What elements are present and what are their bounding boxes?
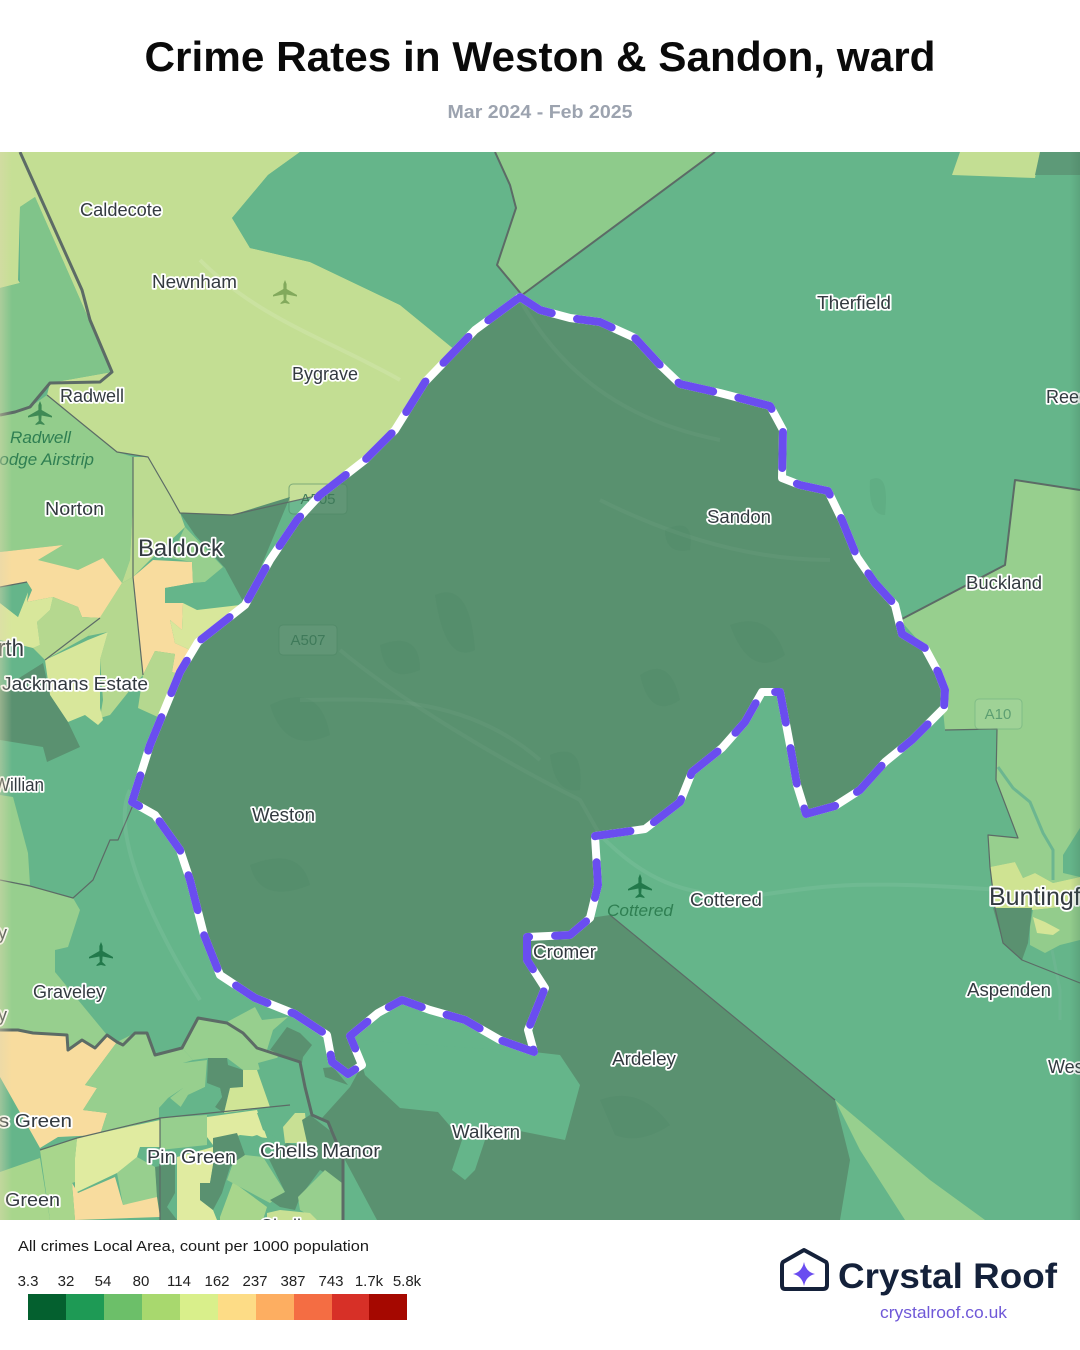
ward texture: woods: [250, 526, 785, 892]
administrative boundaries: [0, 152, 1080, 1220]
legend: [18, 1238, 422, 1320]
airport icons: [28, 280, 652, 966]
place labels: Caldecote: [80, 200, 162, 220]
legend values: 162: [204, 1273, 230, 1290]
region: top centre medium: [232, 152, 452, 348]
river: Rib: [997, 766, 1054, 880]
place labels: Ardeley: [612, 1049, 676, 1069]
region: top right patches: [952, 152, 1040, 178]
legend colour scale: [28, 1294, 407, 1320]
legend values: 80: [133, 1273, 149, 1290]
logo wordmark: Crystal Roof: [838, 1257, 1057, 1296]
place labels: Jackmans Estate: [2, 674, 148, 694]
legend values: 54: [95, 1273, 111, 1290]
region: south Baldock green: [138, 651, 176, 717]
region: Baldock yellow green: [122, 457, 185, 583]
region: top centre light: [495, 152, 715, 295]
region: Norton: [0, 395, 133, 583]
airport names: [0, 428, 674, 920]
region: Letchworth pale: [0, 592, 53, 648]
region: Baldock light green: [170, 527, 223, 583]
road badges: [279, 484, 1022, 729]
region: Pin Green area: [207, 1110, 267, 1145]
legend values: [18, 1273, 422, 1290]
place labels: Baldock: [138, 535, 224, 562]
ward area: Weston and Sandon: [132, 297, 945, 1074]
region: Jackmans dark: [0, 663, 80, 762]
road badges: A10: [985, 706, 1011, 723]
place labels: Cromer: [533, 942, 596, 962]
region: Baldock medium: [165, 582, 206, 588]
region: Letchworth green: [88, 577, 143, 718]
road badges: A505: [300, 491, 336, 508]
place labels: Aspenden: [967, 980, 1051, 1000]
region: Stevenage west light: [83, 1033, 193, 1135]
place labels: Radwell: [60, 386, 124, 406]
title: Crime Rates in Weston & Sandon, ward: [144, 33, 935, 80]
region: south-east light green: [835, 1100, 985, 1220]
faint roads and woods outside the ward: [125, 260, 1000, 1000]
region: south central dark: [322, 915, 850, 1220]
place labels: Chells: [260, 1216, 310, 1236]
legend values: 237: [242, 1273, 268, 1290]
place labels: Pin Green: [147, 1147, 236, 1167]
legend values: 1.7k: [355, 1273, 384, 1290]
region: north-east light green: [900, 480, 1080, 883]
legend values: 743: [318, 1273, 344, 1290]
region: Radwell west: [0, 197, 112, 415]
region: Baldock north dark: [180, 497, 290, 605]
region: orange Baldock: [133, 560, 193, 675]
place labels: Norton: [45, 499, 104, 519]
region: Walkern medium: [363, 1052, 580, 1180]
logo: Crystal Roof: [782, 1250, 1057, 1322]
region: Chells dark: [270, 1027, 312, 1063]
airport names: Radwell: [10, 428, 72, 447]
legend values: 3.3: [18, 1273, 38, 1290]
region: Stevenage orange: [0, 1030, 117, 1148]
ward texture: roads: [406, 701, 422, 708]
place labels: Cottered: [690, 890, 762, 910]
place labels: Sandon: [707, 507, 771, 527]
region: far north-west corner: [0, 152, 35, 288]
airport names: Cottered: [607, 901, 674, 920]
place labels: [0, 200, 1080, 1236]
place labels: Buckland: [966, 573, 1042, 593]
region: Baldock south pale: [170, 603, 240, 650]
region: Stevenage north light: [182, 1018, 278, 1070]
ward outline: white and purple dashed: [132, 297, 945, 1074]
region: Stevenage medium block: [159, 1087, 222, 1108]
place labels: Newnham: [152, 272, 237, 292]
legend values: 387: [280, 1273, 306, 1290]
place labels: Therfield: [817, 293, 891, 313]
region: notch at top: [300, 152, 330, 165]
legend values: 32: [58, 1273, 74, 1290]
subtitle: date range: Mar 2024 - Feb 2025: [448, 102, 632, 122]
region: Graveley west: [0, 880, 107, 1050]
road badges: A507: [290, 632, 326, 649]
place labels: Weston: [252, 805, 315, 825]
place labels: Green: [5, 1190, 60, 1210]
logo url: crystalroof.co.uk: [880, 1303, 1008, 1322]
icon: house with star: [782, 1250, 827, 1289]
region: Stevenage dark block: [207, 1058, 243, 1113]
place labels: Graveley: [33, 982, 105, 1002]
region: orange west of Baldock: [0, 545, 122, 618]
place labels: Walkern: [452, 1122, 520, 1142]
place labels: Bygrave: [292, 364, 358, 384]
legend values: 5.8k: [393, 1273, 422, 1290]
region: Buntingford patches: [1063, 828, 1080, 877]
region: north-west low crime area: [20, 152, 455, 515]
legend values: 114: [167, 1273, 191, 1290]
legend title: All crimes Local Area, count per 1000 population: [18, 1238, 369, 1255]
place labels: Chells Manor: [260, 1141, 380, 1161]
